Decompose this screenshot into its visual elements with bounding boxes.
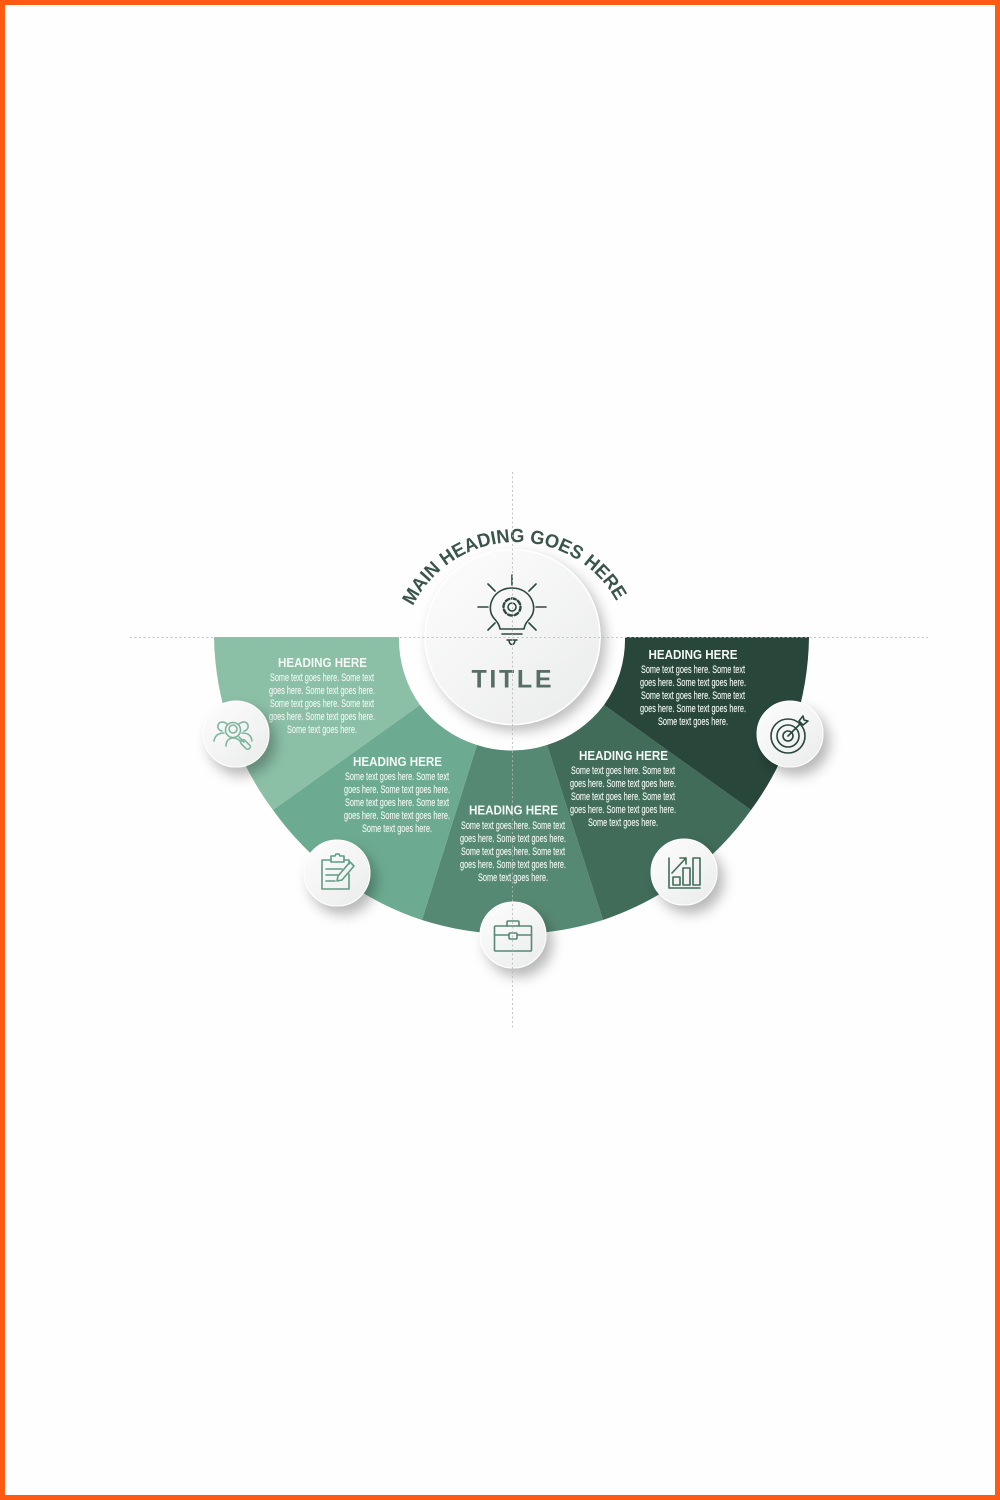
text block: segment 3: HEADING HERE <box>469 804 558 818</box>
text block: segment 2: goes here. Some text goes here. <box>344 810 450 822</box>
text block: segment 1: goes here. Some text goes here. <box>269 685 375 697</box>
text block: segment 1: goes here. Some text goes here. <box>269 711 375 723</box>
text block: segment 3: Some text goes here. Some text <box>461 820 565 832</box>
text block: segment 2: Some text goes here. Some text <box>345 797 449 809</box>
text block: segment 5: Some text goes here. Some text <box>641 664 745 676</box>
icon: people with magnifier <box>214 722 252 750</box>
segment 2 <box>273 705 477 920</box>
title text: TITLE <box>472 666 552 694</box>
text block: segment 5: goes here. Some text goes here. <box>640 703 746 715</box>
text block: segment 3: goes here. Some text goes here. <box>460 859 566 871</box>
text block: segment 4 <box>570 749 676 829</box>
text block: segment 1 <box>269 656 375 736</box>
text block: segment 5: goes here. Some text goes here. <box>640 677 746 689</box>
segment 5 <box>604 637 809 810</box>
text block: segment 2: Some text goes here. Some text <box>345 771 449 783</box>
icon: bar chart with arrow <box>669 858 700 888</box>
text block: segment 4: HEADING HERE <box>579 749 668 763</box>
text block: segment 4: Some text goes here. Some text <box>571 765 675 777</box>
text block: segment 5: Some text goes here. <box>658 716 728 728</box>
central title disc <box>425 550 600 724</box>
curved main heading: MAIN HEADING GOES HERE <box>402 528 627 606</box>
badge: target <box>757 701 823 767</box>
dotted cross guide lines <box>130 472 928 1028</box>
text block: segment 4: Some text goes here. Some text <box>571 791 675 803</box>
badge: clipboard <box>304 840 370 906</box>
text block: segment 3: Some text goes here. Some text <box>461 846 565 858</box>
text block: segment 2 <box>344 755 450 835</box>
text block: segment 4: goes here. Some text goes here. <box>570 778 676 790</box>
text block: segment 3: Some text goes here. <box>478 872 548 884</box>
text block: segment 2: Some text goes here. <box>362 823 432 835</box>
text block: segment 5: Some text goes here. Some text <box>641 690 745 702</box>
text block: segment 2: HEADING HERE <box>353 755 442 769</box>
badge: people search <box>203 701 269 767</box>
text block: segment 3 <box>460 804 566 884</box>
badge: growth chart <box>651 839 717 905</box>
text block: segment 3: goes here. Some text goes here. <box>460 833 566 845</box>
badge: briefcase <box>480 902 546 968</box>
text block: segment 2: goes here. Some text goes here. <box>344 784 450 796</box>
segment 4 <box>547 705 751 920</box>
icon: clipboard and pencil <box>322 854 354 889</box>
panel: semicircle fan <box>214 637 809 934</box>
icon: briefcase <box>494 921 532 951</box>
text block: segment 1: Some text goes here. Some text <box>270 672 374 684</box>
text block: segment 4: goes here. Some text goes here. <box>570 804 676 816</box>
icon: target with arrow <box>771 716 808 753</box>
icon: light bulb with gear <box>478 575 546 644</box>
segment 1 <box>214 637 420 810</box>
text block: segment 5 <box>640 648 746 728</box>
text block: segment 1: Some text goes here. Some text <box>270 698 374 710</box>
segment 3 <box>422 745 603 934</box>
text block: segment 5: HEADING HERE <box>648 648 738 662</box>
text block: segment 1: Some text goes here. <box>287 724 357 736</box>
text block: segment 1: HEADING HERE <box>278 656 367 670</box>
text block: segment 4: Some text goes here. <box>588 817 658 829</box>
